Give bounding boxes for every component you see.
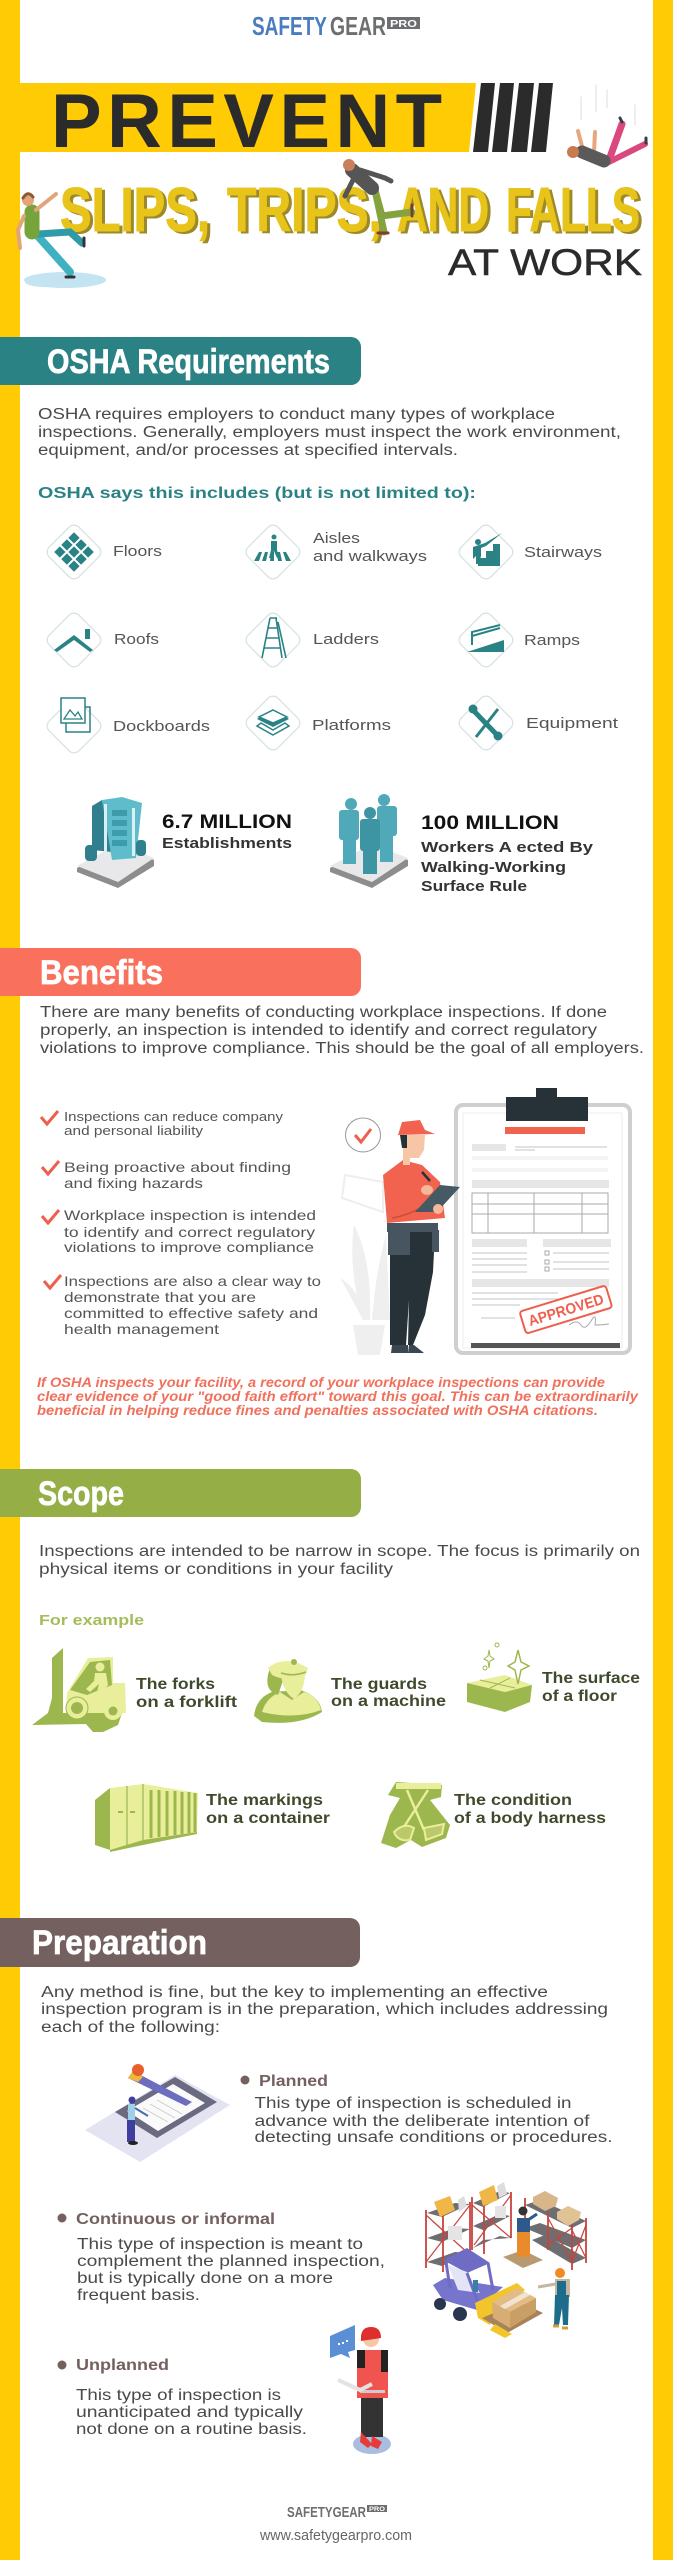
illustration: slipping man bbox=[18, 194, 106, 288]
title: slips, trips, and falls: SLIPS, bbox=[63, 178, 213, 247]
stat: establishments: 6.7 MILLION bbox=[162, 812, 292, 833]
logo: PRO bbox=[390, 19, 417, 30]
footer logo: PRO bbox=[369, 2507, 385, 2513]
heading: scope: Scope bbox=[38, 1475, 124, 1513]
forklift bbox=[433, 2248, 543, 2338]
intro text bbox=[39, 1543, 640, 1578]
item: continuous or informal: but is typically done on a more bbox=[77, 2270, 333, 2287]
illustration: falling man bbox=[567, 85, 646, 162]
check item 2: and fixing hazards bbox=[64, 1175, 203, 1191]
check item 1 bbox=[41, 1110, 284, 1138]
heading: benefits bbox=[0, 948, 361, 996]
item: body harness: of a body harness bbox=[454, 1810, 606, 1827]
title: slips, trips, and falls: TRIPS, bbox=[230, 178, 385, 247]
title: slips, trips, and falls bbox=[60, 176, 643, 247]
heading: preparation: Preparation bbox=[32, 1924, 207, 1962]
check item 1: Inspections can reduce company bbox=[64, 1110, 284, 1124]
item: continuous or informal: This type of inspection is meant to bbox=[77, 2236, 363, 2253]
logo: SAFETY bbox=[252, 11, 327, 41]
item: equipment: Equipment bbox=[526, 716, 618, 732]
item: stairways: Stairways bbox=[524, 545, 602, 561]
illustration: tripping man bbox=[343, 159, 412, 233]
item: platforms bbox=[243, 693, 391, 753]
item: aisles and walkways bbox=[243, 522, 427, 582]
panel: preparation bbox=[0, 1918, 612, 2454]
intro text: There are many benefits of conducting workplace inspections. If done bbox=[40, 1004, 607, 1021]
item: aisles and walkways: Aisles bbox=[313, 531, 360, 547]
intro text: properly, an inspection is intended to identify and correct regulatory bbox=[40, 1022, 597, 1039]
heading: scope bbox=[0, 1469, 361, 1517]
intro text: OSHA requires employers to conduct many types of workplace bbox=[38, 406, 555, 423]
item: body harness bbox=[381, 1782, 606, 1848]
intro text: physical items or conditions in your facility bbox=[39, 1561, 393, 1578]
heading: osha requirements bbox=[0, 337, 361, 385]
callout: good faith note: clear evidence of your "good faith effort" toward this goal. This can be extraordinarily bbox=[37, 1389, 640, 1404]
footer website: www.safetygearpro.com bbox=[259, 2527, 412, 2544]
check item 2: Being proactive about finding bbox=[64, 1159, 291, 1175]
item: planned: advance with the deliberate intention of bbox=[254, 2113, 590, 2130]
item: equipment bbox=[456, 693, 618, 753]
illustration: approved clipboard bbox=[456, 1088, 630, 1353]
item: guard: on a machine bbox=[331, 1693, 446, 1710]
stat: workers affected: Workers A ected By bbox=[421, 839, 594, 856]
check item 3: violations to improve compliance bbox=[64, 1239, 314, 1255]
item: container bbox=[95, 1784, 330, 1852]
intro text bbox=[38, 406, 621, 459]
item: forklift: on a forklift bbox=[136, 1694, 237, 1711]
item: dockboards: Dockboards bbox=[113, 719, 210, 735]
item: dockboards bbox=[44, 696, 210, 756]
callout: good faith note: beneficial in helping reduce fines and penalties associated with OSHA citations. bbox=[37, 1403, 598, 1418]
check item 3: to identify and correct regulatory bbox=[64, 1224, 315, 1240]
intro text: inspection program is in the preparation, which includes addressing bbox=[41, 2001, 608, 2018]
panel: scope bbox=[0, 1469, 640, 1852]
title: slips, trips, and falls: AND bbox=[397, 176, 489, 245]
item: ramps bbox=[456, 610, 580, 670]
stat: workers affected: Surface Rule bbox=[421, 878, 527, 895]
item: ramps: Ramps bbox=[524, 633, 580, 649]
logo bbox=[252, 11, 420, 41]
item: guard bbox=[254, 1659, 446, 1723]
item: platforms: Platforms bbox=[312, 718, 391, 734]
heading: benefits: Benefits bbox=[40, 954, 163, 992]
item: aisles and walkways: and walkways bbox=[313, 549, 427, 565]
heading: preparation bbox=[0, 1918, 360, 1967]
item: continuous or informal: complement the planned inspection, bbox=[77, 2253, 385, 2270]
check item 4 bbox=[44, 1273, 321, 1337]
stat: workers affected: 100 MILLION bbox=[421, 813, 559, 834]
logo: GEAR bbox=[330, 11, 386, 41]
checklist bbox=[41, 1110, 321, 1337]
item: unplanned bbox=[58, 2357, 307, 2438]
item: continuous or informal: Continuous or informal bbox=[76, 2211, 275, 2228]
check item 2 bbox=[42, 1159, 291, 1191]
callout: good faith note bbox=[37, 1375, 640, 1418]
subheading: OSHA says this includes (but is not limited to): bbox=[38, 485, 476, 502]
panel: benefits bbox=[0, 948, 644, 1418]
item: unplanned: not done on a routine basis. bbox=[76, 2421, 307, 2438]
illustration: worker with speech bubble bbox=[330, 2325, 391, 2454]
item: roofs: Roofs bbox=[114, 632, 159, 648]
intro text: Any method is fine, but the key to implementing an effective bbox=[41, 1984, 548, 2001]
item: unplanned: unanticipated and typically bbox=[76, 2404, 303, 2421]
item: body harness: The condition bbox=[454, 1792, 572, 1809]
item: guard: The guards bbox=[331, 1676, 427, 1693]
item: ladders bbox=[243, 610, 379, 670]
stat: workers affected bbox=[330, 794, 594, 895]
racks: right bbox=[525, 2191, 586, 2270]
intro text: Inspections are intended to be narrow in scope. The focus is primarily on bbox=[39, 1543, 640, 1560]
illustration: inspector with plant and speech bubble bbox=[340, 1118, 460, 1355]
item: continuous or informal bbox=[58, 2211, 385, 2304]
title: slips, trips, and falls: TRIPS, bbox=[227, 176, 382, 245]
heading: osha requirements: OSHA Requirements bbox=[47, 343, 330, 381]
stat: establishments: Establishments bbox=[162, 835, 292, 852]
stat: establishments bbox=[77, 797, 292, 888]
item: container: on a container bbox=[206, 1810, 330, 1827]
title: at work: AT WORK bbox=[448, 242, 642, 283]
item: container: The markings bbox=[206, 1792, 323, 1809]
illustration: planned clipboard bbox=[85, 2064, 230, 2162]
check item 4: demonstrate that you are bbox=[64, 1289, 256, 1305]
item: floors bbox=[44, 522, 162, 582]
title banner: prevent: PREVENT bbox=[51, 79, 442, 164]
check item 4: Inspections are also a clear way to bbox=[64, 1273, 321, 1289]
supervisor bbox=[538, 2268, 570, 2328]
intro text: each of the following: bbox=[41, 2019, 220, 2036]
item: stairways bbox=[456, 522, 602, 582]
intro text bbox=[40, 1004, 644, 1057]
item: unplanned: This type of inspection is bbox=[76, 2387, 281, 2404]
panel: osha requirements bbox=[0, 337, 621, 895]
callout: good faith note: If OSHA inspects your facility, a record of your workplace inspections can provide bbox=[37, 1375, 606, 1390]
subheading: for example: For example bbox=[39, 1612, 144, 1629]
check item 3 bbox=[42, 1207, 316, 1255]
item: roofs bbox=[44, 610, 159, 670]
intro text: equipment, and/or processes at specified intervals. bbox=[38, 442, 458, 459]
check item 3: Workplace inspection is intended bbox=[64, 1207, 316, 1223]
footer logo: SAFETYGEAR bbox=[287, 2504, 366, 2521]
item: floor surface: of a floor bbox=[542, 1688, 617, 1705]
check item 4: committed to effective safety and bbox=[64, 1305, 318, 1321]
item: floors: Floors bbox=[113, 544, 162, 560]
stat: workers affected: Walking-Working bbox=[421, 859, 566, 876]
check item 1: and personal liability bbox=[64, 1124, 204, 1138]
intro text: inspections. Generally, employers must inspect the work environment, bbox=[38, 424, 621, 441]
item: planned: Planned bbox=[259, 2073, 328, 2090]
item: forklift bbox=[32, 1648, 237, 1732]
item: planned bbox=[240, 2073, 612, 2146]
title: slips, trips, and falls: SLIPS, bbox=[60, 176, 210, 245]
order picker on pallet bbox=[503, 2206, 543, 2268]
item: planned: This type of inspection is scheduled in bbox=[254, 2095, 572, 2112]
intro text bbox=[41, 1984, 608, 2036]
item: planned: detecting unsafe conditions or procedures. bbox=[254, 2129, 612, 2146]
illustration: warehouse with forklift bbox=[426, 2182, 586, 2338]
check item 4: health management bbox=[64, 1321, 219, 1337]
title: slips, trips, and falls: AND bbox=[400, 178, 492, 247]
illustration: approved clipboard: APPROVED bbox=[526, 1291, 606, 1330]
item: floor surface: The surface bbox=[542, 1670, 640, 1687]
item: forklift: The forks bbox=[136, 1676, 215, 1693]
item: ladders: Ladders bbox=[313, 632, 379, 648]
item: continuous or informal: frequent basis. bbox=[77, 2287, 200, 2304]
item: unplanned: Unplanned bbox=[76, 2357, 169, 2374]
intro text: violations to improve compliance. This should be the goal of all employers. bbox=[40, 1040, 644, 1057]
racks: left bbox=[426, 2182, 511, 2272]
item: floor surface bbox=[467, 1643, 640, 1712]
